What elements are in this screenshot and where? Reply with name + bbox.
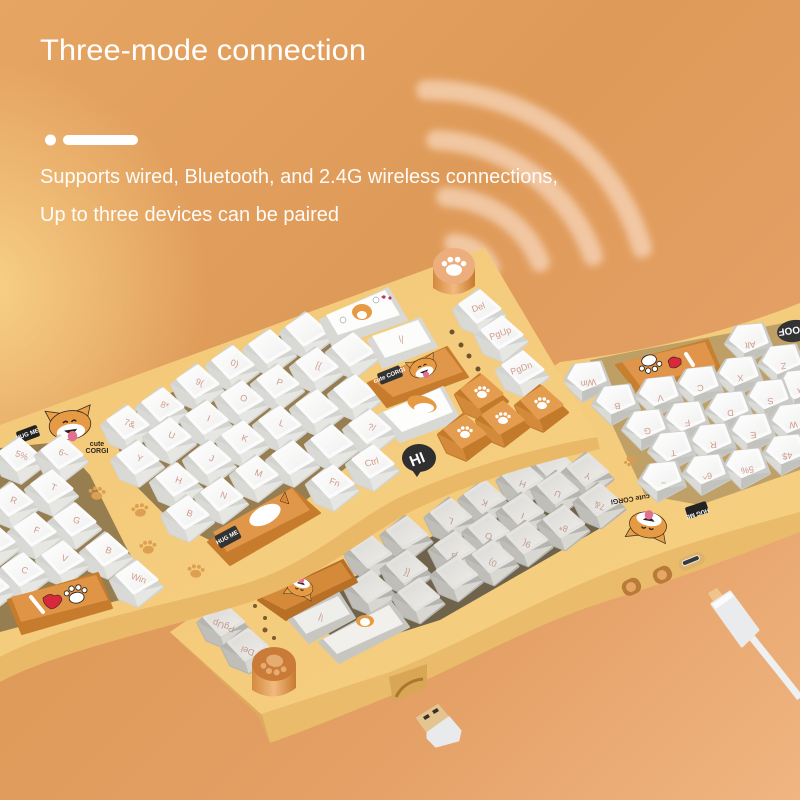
i love paw orange key bbox=[8, 573, 112, 634]
right half keys: W bbox=[788, 419, 798, 431]
main block bottom rows: Fn bbox=[328, 476, 341, 489]
bullet divider bbox=[45, 134, 138, 146]
corgi sticker left bbox=[15, 405, 109, 455]
cute corgi orange key bbox=[368, 347, 468, 407]
left block keys: Win bbox=[130, 571, 148, 586]
main block bottom rows: B bbox=[185, 508, 194, 519]
hug me orange key bbox=[208, 488, 320, 565]
key wells bbox=[0, 325, 380, 632]
description text: Up to three devices can be paired bbox=[40, 204, 339, 226]
right half keys: 4$ bbox=[782, 450, 793, 462]
lower keyboard alpha keys: 0) bbox=[487, 557, 498, 569]
lower orange corgi key bbox=[258, 560, 357, 620]
right half keys: S bbox=[767, 396, 774, 406]
lower keyboard alpha keys: 7& bbox=[593, 499, 607, 513]
lower corgi spacebar key bbox=[319, 602, 409, 663]
left block keys: C bbox=[20, 564, 30, 576]
lower keyboard alpha keys: H bbox=[518, 478, 527, 490]
main block home row: J bbox=[208, 453, 216, 464]
main block home row: H bbox=[174, 474, 183, 486]
lower keyboard alpha keys: Y bbox=[583, 470, 592, 482]
speech bubble: HI: HI bbox=[407, 449, 427, 471]
lower keyboard alpha keys: L bbox=[447, 515, 455, 526]
left block keys bbox=[0, 436, 162, 613]
lower keyboard body bbox=[170, 303, 800, 743]
lower backslash key bbox=[289, 593, 355, 643]
cute corgi orange key: cute CORGI bbox=[373, 367, 407, 385]
upper keyboard body bbox=[0, 248, 600, 682]
left block keys: R bbox=[9, 494, 19, 506]
lower keyboard alpha keys: K bbox=[480, 497, 489, 509]
main block top alpha row: O bbox=[239, 392, 249, 404]
main block number row: 9( bbox=[194, 376, 205, 388]
right half keys: Z bbox=[780, 361, 787, 371]
main block number row: 0) bbox=[229, 357, 240, 369]
lower keyboard alpha keys: I bbox=[520, 511, 526, 521]
lower nav keys: Del bbox=[240, 644, 256, 658]
right half keys: B bbox=[614, 401, 621, 411]
lower keyboard alpha keys: [{ bbox=[402, 567, 411, 579]
lower keyboard alpha keys: U bbox=[553, 488, 562, 500]
right half keys bbox=[564, 320, 800, 505]
wifi signal arcs bbox=[426, 90, 642, 268]
hug me orange key: HUG ME bbox=[216, 530, 240, 546]
rotary knob bbox=[433, 248, 475, 295]
key well shadow bbox=[300, 470, 610, 650]
lower rotary knob bbox=[252, 647, 296, 697]
nav keys bbox=[454, 290, 548, 396]
left block keys: 6~ bbox=[57, 447, 70, 460]
main block top alpha row: I bbox=[206, 413, 212, 423]
main block home row: L bbox=[278, 418, 286, 429]
backslash key: \| bbox=[399, 334, 403, 344]
speech bubble: woof bbox=[776, 318, 800, 344]
lower indicator icons bbox=[253, 604, 276, 640]
main block number row bbox=[102, 313, 332, 451]
lower keyboard alpha keys: 9( bbox=[521, 538, 532, 550]
paw prints bbox=[88, 486, 205, 578]
corgi white key bbox=[378, 387, 460, 442]
lower nav keys bbox=[198, 603, 273, 673]
lower keyboard alpha keys: P bbox=[450, 548, 459, 560]
corgi sticker left: CORGI bbox=[86, 448, 109, 455]
main block bottom rows: M bbox=[253, 467, 264, 479]
indicator icons bbox=[450, 330, 480, 372]
description text: Supports wired, Bluetooth, and 2.4G wireless connections, bbox=[40, 166, 558, 188]
right half keys: 6^ bbox=[701, 470, 713, 482]
lower backslash key: \| bbox=[317, 612, 325, 623]
usb dongle bbox=[417, 705, 460, 746]
right half keys: G bbox=[643, 426, 652, 436]
backslash key bbox=[368, 318, 437, 368]
left block keys: V bbox=[60, 553, 69, 564]
main block home row: Y bbox=[135, 453, 144, 464]
right half keys: R bbox=[709, 440, 717, 450]
title: Three-mode connection bbox=[40, 34, 366, 67]
main block bottom rows bbox=[162, 410, 398, 541]
main block home row: K bbox=[240, 433, 249, 444]
description text bbox=[40, 166, 558, 226]
upper keyboard bbox=[0, 248, 600, 682]
corgi sticker right: HUG ME bbox=[685, 506, 710, 520]
nav keys: PgDn bbox=[509, 360, 534, 377]
right half keys: T bbox=[670, 448, 677, 458]
left block keys: G bbox=[72, 514, 82, 526]
lower keyboard bbox=[170, 303, 800, 743]
right half keys: E bbox=[750, 430, 757, 440]
main block top alpha row bbox=[144, 333, 378, 463]
ports bbox=[619, 550, 707, 598]
right half keys: 5% bbox=[740, 464, 755, 476]
main block number row: 8* bbox=[159, 399, 171, 412]
corgi sticker right: cute CORGI bbox=[610, 492, 650, 505]
corgi sticker left: HUG ME bbox=[15, 428, 40, 442]
corgi sticker left: cute bbox=[90, 441, 104, 448]
nav keys: Del bbox=[470, 300, 486, 314]
main block bottom rows: ?/ bbox=[366, 421, 377, 433]
lower keyboard alpha keys bbox=[345, 448, 625, 623]
right half keys: C bbox=[696, 383, 704, 393]
main block home row bbox=[112, 375, 380, 508]
right half keys: F bbox=[684, 418, 691, 428]
right half keys: V bbox=[657, 393, 664, 403]
main block bottom rows: Ctrl bbox=[364, 456, 380, 469]
right half keys: D bbox=[726, 408, 734, 418]
main block number row: 7& bbox=[123, 417, 137, 430]
main block top alpha row: U bbox=[167, 429, 176, 441]
nav keys: PgUp bbox=[488, 325, 513, 342]
main block bottom rows: N bbox=[219, 489, 228, 501]
speech bubble: HI bbox=[402, 444, 436, 477]
left block keys: T bbox=[49, 482, 58, 493]
right half keys: X bbox=[737, 373, 744, 383]
usb cable bbox=[708, 588, 800, 698]
main block top alpha row: [{ bbox=[314, 360, 323, 371]
right half keys: Win bbox=[580, 377, 597, 389]
right paw print bbox=[624, 456, 638, 466]
right half keys: Alt bbox=[744, 339, 756, 351]
lower nav keys: PgUp bbox=[211, 617, 236, 634]
lower keyboard alpha keys: O bbox=[484, 530, 494, 542]
orange paw keys bbox=[439, 375, 567, 460]
corgi top key bbox=[320, 288, 407, 347]
left block keys: F bbox=[32, 525, 41, 536]
right half keys: ~ bbox=[660, 478, 667, 488]
corgi sticker right bbox=[610, 492, 710, 544]
right orange bar key bbox=[616, 340, 722, 395]
main block top alpha row: P bbox=[275, 377, 284, 388]
lower keyboard alpha keys: 8* bbox=[557, 522, 569, 534]
left block keys: 5% bbox=[14, 448, 30, 462]
left block keys: B bbox=[104, 545, 113, 556]
